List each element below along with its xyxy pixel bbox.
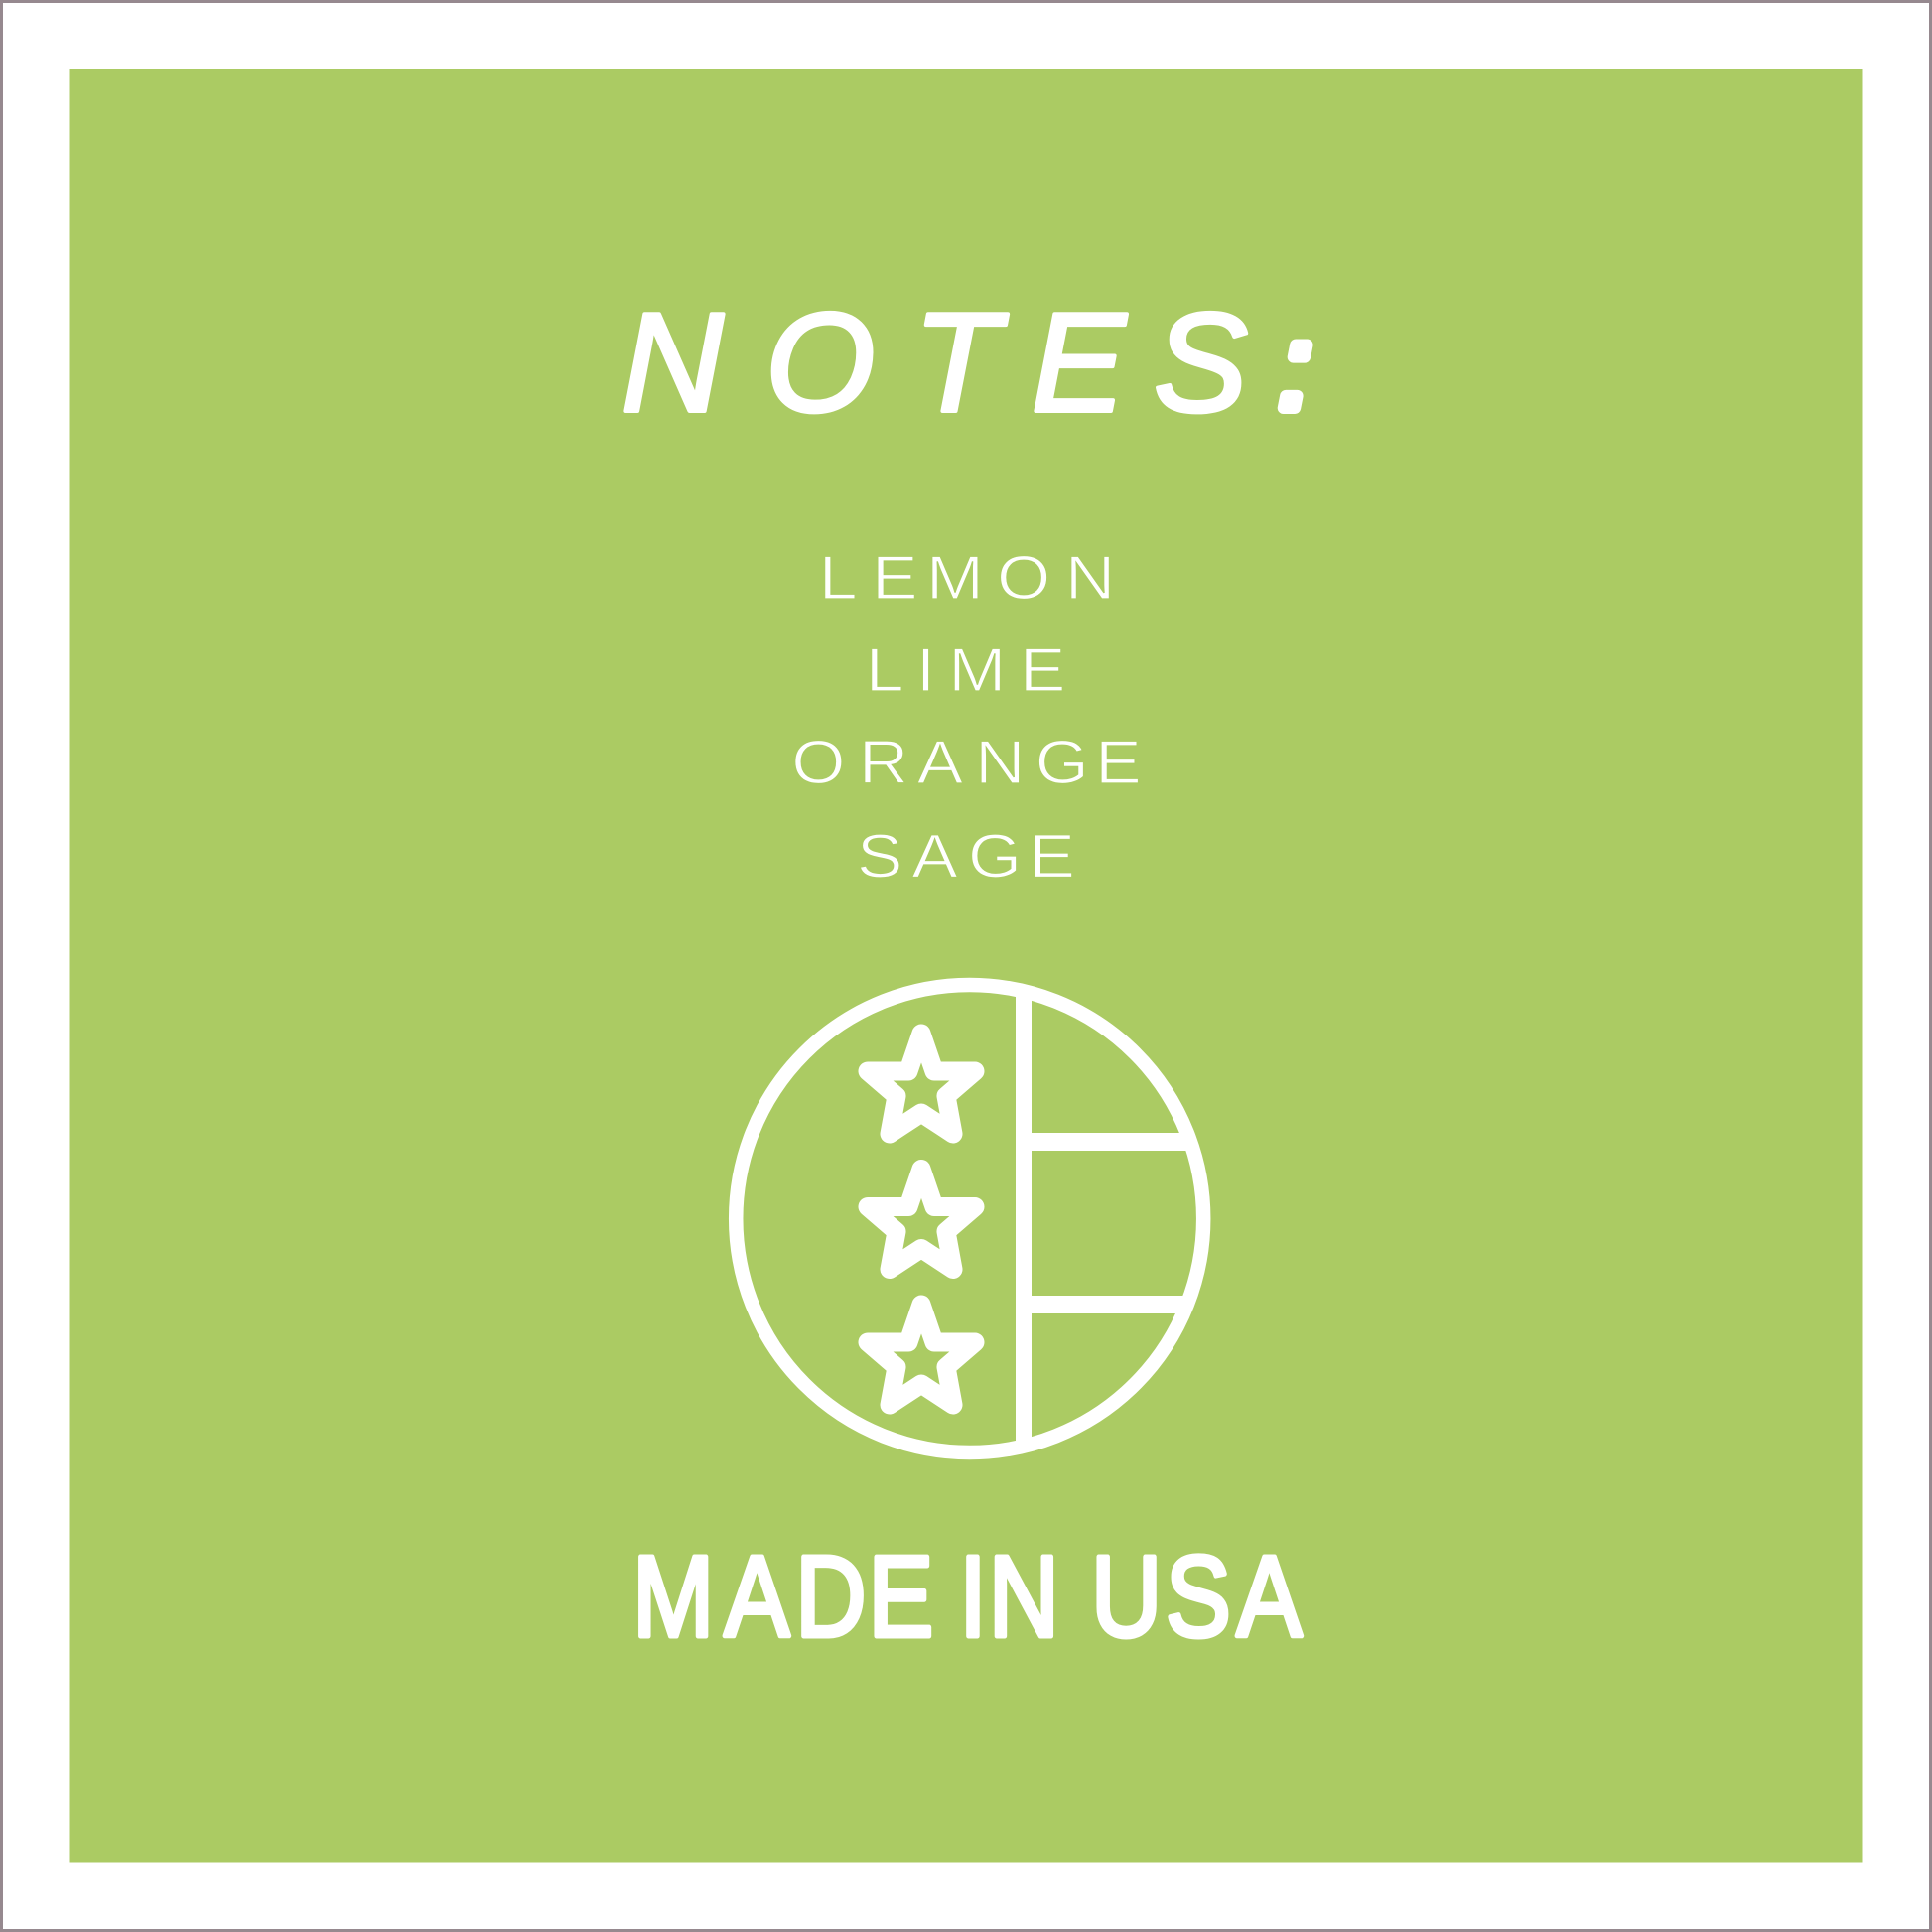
note: sage: SAGE (857, 821, 1075, 891)
note: lime: LIME (866, 634, 1065, 704)
icon part: upper stripe line (1024, 1133, 1187, 1151)
icon part: lower stripe line (1024, 1296, 1189, 1313)
icon part: outer circle (736, 985, 1203, 1452)
icon part: middle star (868, 1170, 975, 1269)
icon part: vertical divider (1016, 993, 1032, 1445)
icon: American flag globe badge (736, 985, 1203, 1452)
title: NOTES: : (1279, 301, 1311, 434)
icon part: top star (868, 1034, 975, 1134)
note: orange: ORANGE (791, 727, 1142, 796)
note: lemon: LEMON (819, 542, 1115, 612)
icon part: bottom star (868, 1305, 975, 1405)
caption: made in USA: MADE IN USA (632, 1532, 1302, 1661)
text block: scent notes list (791, 542, 1142, 891)
title: NOTES: NOTES (621, 284, 1248, 442)
